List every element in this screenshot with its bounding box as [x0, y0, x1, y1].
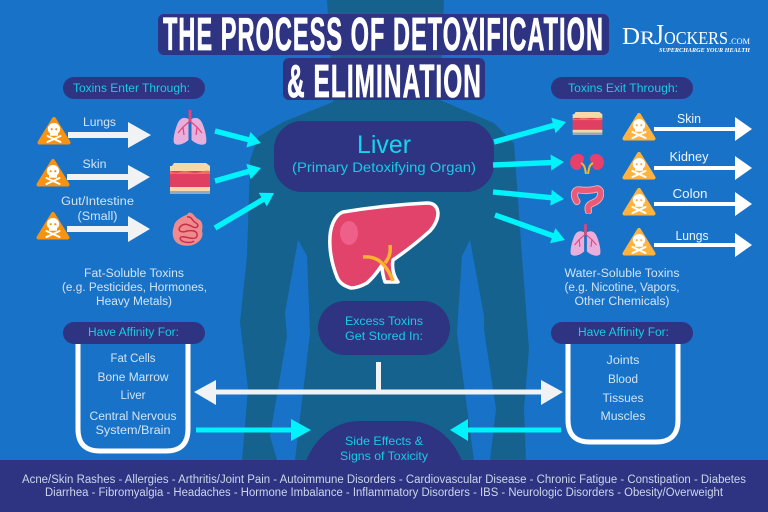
entry row: skin: Skin: [82, 159, 106, 171]
panel: fat affinity list: Liver: [120, 390, 146, 402]
panel: side effects list band: Diarrhea - Fibromyalgia - Headaches - Hormone Imbalance - Inflammatory Disorders - IBS - Neurologic Disorders - Obesity/Overweight: [45, 487, 724, 499]
logo: .COM: [729, 36, 750, 46]
text: fat-soluble toxins: Heavy Metals): [96, 296, 172, 308]
cyan arrows out of liver: [492, 114, 568, 248]
body silhouette: [240, 0, 529, 460]
logo: OCKERS: [664, 28, 728, 48]
panel: water affinity list: [551, 322, 693, 442]
cyan arrows into liver: [211, 123, 278, 235]
panel: water affinity list: Have Affinity For:: [578, 327, 669, 339]
pill: toxins exit through: Toxins Exit Through:: [568, 83, 678, 95]
panel: water affinity list: Blood: [608, 374, 638, 386]
panel: excess toxins: Get Stored In:: [345, 329, 423, 343]
text: water-soluble toxins: Water-Soluble Toxins: [564, 268, 680, 280]
entry row: skin: [38, 159, 210, 194]
exit row: skin: [573, 111, 752, 141]
entry row: lungs: Lungs: [83, 117, 116, 129]
text: fat-soluble toxins: Fat-Soluble Toxins: [84, 268, 184, 280]
pill: toxins enter through: Toxins Enter Through:: [73, 83, 190, 95]
exit row: kidney: [570, 149, 752, 180]
panel: liver: Liver: [357, 131, 411, 159]
exit row: colon: [574, 186, 752, 216]
text: fat-soluble toxins: (e.g. Pesticides, Hormones,: [62, 282, 207, 294]
panel: excess toxins: Excess Toxins: [345, 314, 423, 328]
panel: liver: [274, 121, 494, 192]
panel: side effects: Signs of Toxicity: [340, 449, 428, 463]
panel: water affinity list: Muscles: [600, 411, 646, 423]
panel: fat affinity list: System/Brain: [96, 425, 170, 437]
panel: fat affinity list: Bone Marrow: [98, 372, 169, 384]
exit row: kidney: Kidney: [670, 149, 709, 164]
panel: side effects list band: Acne/Skin Rashes - Allergies - Arthritis/Joint Pain - Autoimmune Disorders - Cardiovascular Disease - Chronic Fatigue - Constipation - Diabetes: [22, 474, 746, 486]
text: water-soluble toxins: [564, 268, 680, 308]
title: & ELIMINATION: [287, 55, 482, 107]
entry row: lungs: [40, 110, 206, 148]
panel: liver: (Primary Detoxifying Organ): [292, 159, 476, 175]
logo: SUPERCHARGE YOUR HEALTH: [659, 47, 751, 54]
cyan arrow: left list to side effects: [196, 419, 311, 441]
panel: side effects: Side Effects &: [345, 434, 423, 448]
pill: toxins enter through: [63, 77, 205, 99]
title: [158, 8, 609, 107]
logo: R: [640, 28, 655, 49]
panel: fat affinity list: Central Nervous: [90, 411, 177, 423]
logo: [622, 20, 751, 54]
logo: J: [654, 20, 664, 51]
white branching arrow: [194, 362, 563, 405]
exit row: lungs: Lungs: [676, 228, 709, 243]
entry row: gut: [38, 196, 203, 246]
panel: fat affinity list: Fat Cells: [110, 353, 156, 365]
panel: fat affinity list: Have Affinity For:: [88, 327, 179, 339]
panel: water affinity list: Joints: [606, 355, 640, 367]
cyan arrow: right list to side effects: [450, 419, 561, 441]
entry row: gut: Gut/Intestine: [61, 196, 134, 208]
exit row: colon: Colon: [672, 186, 708, 201]
icon: liver: [330, 203, 438, 288]
text: water-soluble toxins: (e.g. Nicotine, Vapors,: [564, 282, 680, 294]
panel: fat affinity list: [63, 322, 205, 451]
logo: D: [622, 24, 640, 50]
entry row: gut: (Small): [78, 211, 118, 223]
panel: side effects: [306, 421, 462, 463]
panel: side effects list band: [0, 460, 768, 512]
pill: toxins exit through: [551, 77, 693, 99]
text: fat-soluble toxins: [62, 268, 207, 308]
panel: excess toxins: [318, 301, 450, 355]
panel: water affinity list: Tissues: [602, 393, 644, 405]
exit row: lungs: [571, 224, 752, 257]
exit row: skin: Skin: [677, 111, 701, 126]
text: water-soluble toxins: Other Chemicals): [574, 296, 670, 308]
